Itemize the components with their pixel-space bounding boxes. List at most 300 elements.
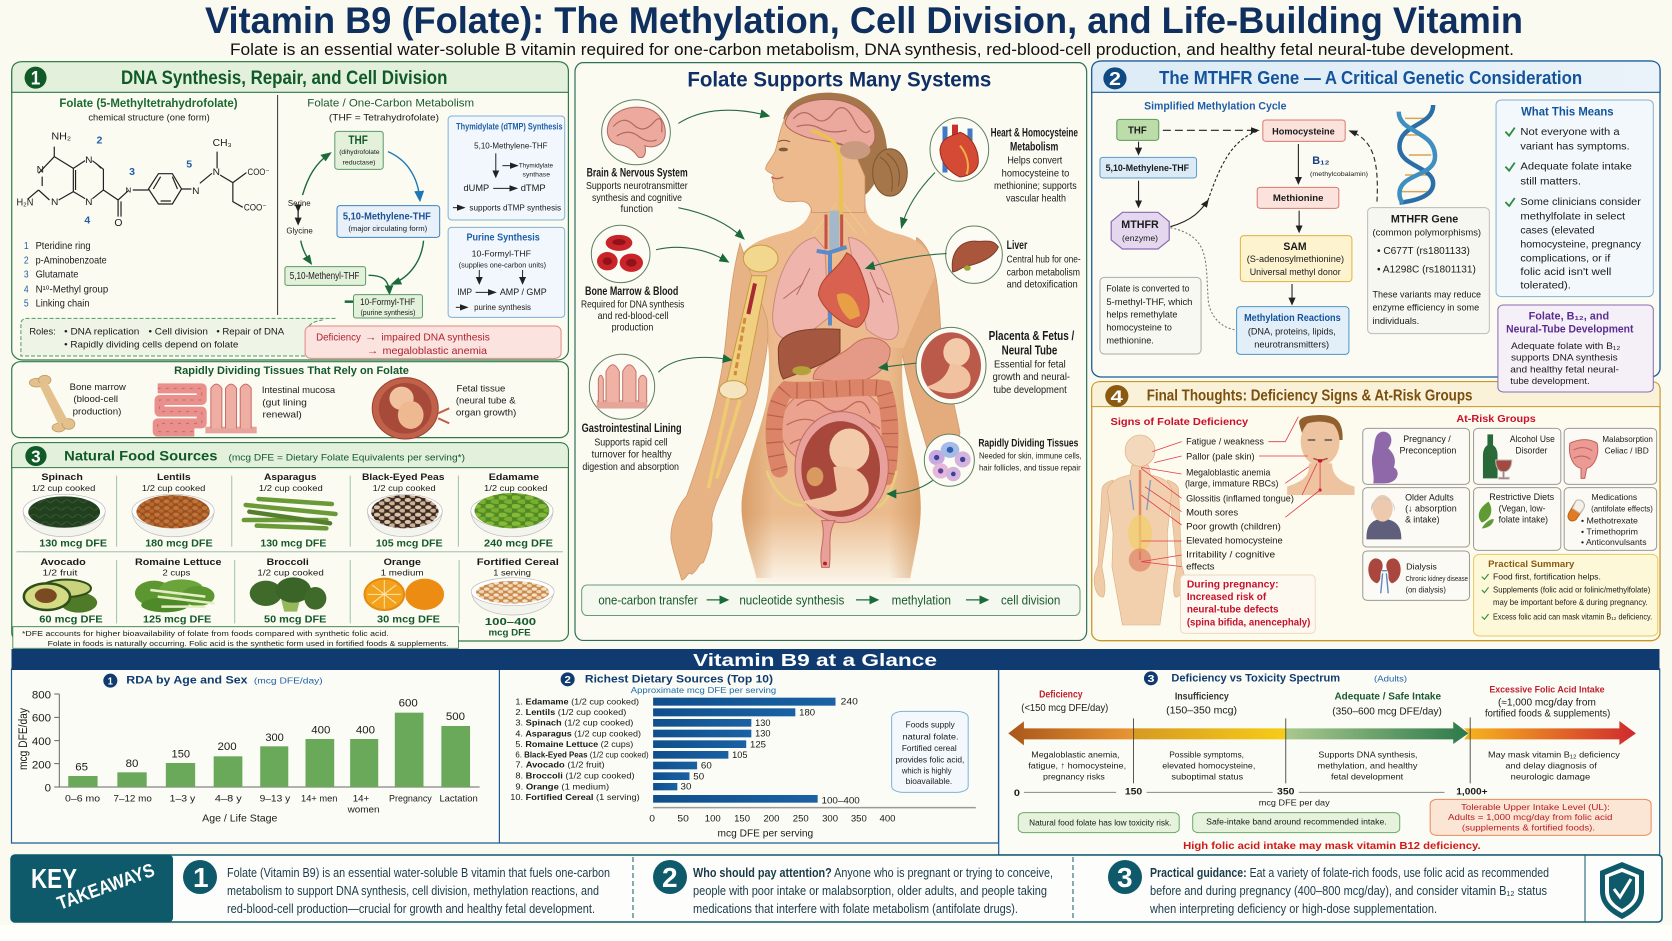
zone descriptions: methylation, and healthy bbox=[1318, 761, 1418, 771]
bar values: 180 bbox=[799, 707, 815, 718]
y axis values: 200 bbox=[32, 758, 51, 771]
zone descriptions: fetal development bbox=[1331, 772, 1403, 782]
callout: upper limit: Adults = 1,000 mcg/day from folic acid bbox=[1448, 813, 1612, 823]
box: what this means: cases (elevated bbox=[1520, 225, 1595, 236]
pathway bar: methylation bbox=[892, 593, 951, 608]
node: formyl THF bbox=[354, 295, 422, 318]
food: asparagus: Asparagus bbox=[264, 472, 316, 483]
node: methylene THF bbox=[1100, 157, 1197, 178]
zone labels: Adequate / Safe Intake bbox=[1334, 691, 1442, 702]
food: avocado: Avocado bbox=[40, 557, 86, 568]
text: gastrointestinal lining: digestion and absorption bbox=[582, 461, 679, 472]
panel: natural food sources bbox=[12, 443, 568, 648]
zone descriptions: suboptimal status bbox=[1171, 772, 1243, 782]
heading: folate structure: Folate (5-Methyltetrahydrofolate) bbox=[59, 97, 238, 110]
food: orange: 1 medium bbox=[381, 568, 424, 578]
structure legend: 1 bbox=[24, 241, 29, 252]
box: MTHFR gene polymorphisms: individuals. bbox=[1373, 316, 1419, 327]
food: avocado: 1/2 fruit bbox=[43, 568, 78, 578]
bone marrow label: Bone marrow bbox=[70, 382, 126, 393]
box: purine synthesis: AMP / GMP bbox=[500, 287, 547, 298]
banner: vitamin B9 at a glance: Vitamin B9 at a Glance bbox=[693, 650, 937, 670]
category labels: 0–6 mo bbox=[65, 793, 100, 804]
chemical structure diagram: 2 bbox=[96, 135, 102, 147]
zone descriptions: fatigue, ↑ homocysteine, bbox=[1028, 761, 1126, 771]
text: bone marrow and blood: Required for DNA synthesis bbox=[581, 299, 685, 310]
bone marrow label: (blood-cell bbox=[73, 394, 118, 405]
takeaway 1: red-blood-cell production—crucial for growth and healthy fetal development. bbox=[227, 901, 595, 916]
box: what this means: folic acid isn't well bbox=[1520, 267, 1611, 278]
text: bone marrow and blood: Bone Marrow & Blood bbox=[585, 285, 679, 298]
card: older adults: & intake) bbox=[1405, 515, 1440, 525]
icon: bone bbox=[29, 375, 75, 432]
node: methionine bbox=[1257, 187, 1339, 208]
x axis title: mcg DFE per serving bbox=[718, 828, 813, 839]
key takeaways badge bbox=[11, 855, 173, 922]
node: MTHFR enzyme bbox=[1111, 212, 1169, 249]
chart heading: Deficiency vs Toxicity Spectrum bbox=[1171, 671, 1340, 684]
deficiency callout: Deficiency bbox=[316, 333, 362, 344]
large intestine bbox=[774, 388, 890, 477]
intestinal mucosa label: (gut lining bbox=[262, 398, 307, 409]
heading: food sources bbox=[64, 449, 465, 464]
pathway bar: cell division bbox=[1001, 593, 1060, 608]
text: placenta and fetus: tube development bbox=[993, 384, 1067, 395]
icon: brain bbox=[602, 100, 670, 165]
box: practical summary bbox=[1474, 554, 1658, 636]
heading: MTHFR: The MTHFR Gene — A Critical Genetic Consideration bbox=[1159, 68, 1582, 89]
structure legend: 2 bbox=[24, 256, 29, 267]
x axis labels bbox=[649, 814, 896, 824]
node: THF: (dihydrofolate bbox=[339, 149, 380, 156]
text: brain and nervous system: Brain & Nervous System bbox=[587, 167, 688, 179]
fetal tissue label: (neural tube & bbox=[456, 396, 516, 407]
food: romaine lettuce: 125 mcg DFE bbox=[143, 615, 211, 626]
node: MTHFR enzyme: MTHFR bbox=[1121, 220, 1159, 231]
food: lentils: Lentils bbox=[157, 472, 191, 483]
note: folate conversion: helps remethylate bbox=[1106, 310, 1177, 320]
dose scale: mcg DFE per day bbox=[1259, 799, 1331, 808]
callout: upper limit bbox=[1430, 799, 1651, 835]
card: dialysis: Dialysis bbox=[1406, 562, 1437, 571]
note: folate conversion: Folate is converted to bbox=[1106, 284, 1189, 294]
takeaway 1: metabolism to support DNA synthesis, cell division, methylation reactions, and bbox=[227, 883, 599, 898]
DFE footnote bbox=[13, 627, 458, 648]
bar value labels: 150 bbox=[172, 748, 190, 760]
panel: MTHFR gene bbox=[1092, 61, 1660, 377]
text: bone marrow and blood: and red-blood-cell bbox=[598, 310, 668, 321]
hair and bun bbox=[783, 93, 887, 195]
key takeaways badge: TAKEAWAYS bbox=[55, 860, 158, 915]
food: fortified cereal: 100–400 bbox=[485, 616, 536, 628]
box: thymidylate synthesis: 5,10-Methylene-THF bbox=[474, 141, 548, 151]
x axis labels: 350 bbox=[851, 814, 867, 824]
x axis labels: 400 bbox=[880, 814, 896, 824]
text: heart and homocysteine: methionine; supports bbox=[994, 180, 1077, 191]
food: lentils: 180 mcg DFE bbox=[145, 539, 213, 550]
node: methylene THF bbox=[337, 206, 440, 237]
category labels: 1–3 y bbox=[170, 793, 196, 804]
deficiency callout: → bbox=[365, 333, 377, 344]
subtitle: Folate is an essential water-soluble B vitamin required for one-carbon metabolism, DNA synthesis, red-blood-cell production, and healthy fetal neural-tube development. bbox=[230, 41, 1514, 59]
food: broccoli bbox=[250, 557, 327, 626]
serine glycine label bbox=[286, 198, 313, 235]
food: asparagus bbox=[244, 472, 336, 550]
structure legend: 3 bbox=[24, 270, 29, 281]
warning line: High folic acid intake may mask vitamin B12 deficiency. bbox=[1183, 840, 1481, 852]
node: SAM bbox=[1240, 236, 1352, 282]
box: what this means: variant has symptoms. bbox=[1520, 141, 1630, 152]
takeaway 1 bbox=[183, 860, 610, 916]
x axis labels: 150 bbox=[734, 814, 750, 824]
box: practical summary: Practical Summary bbox=[1488, 559, 1575, 570]
zone labels bbox=[1021, 685, 1610, 719]
note: fortified cereal: Foods supply bbox=[906, 720, 955, 730]
card: restrictive diets bbox=[1474, 488, 1561, 550]
list: deficiency signs: Poor growth (children) bbox=[1186, 522, 1281, 532]
food labels: 7. Avocado (1/2 fruit) bbox=[515, 760, 605, 770]
chemical structure diagram: 3 bbox=[129, 166, 135, 178]
text: rapidly dividing tissues: hair follicles, and tissue repair bbox=[979, 463, 1081, 473]
box: what this means: Not everyone with a bbox=[1520, 127, 1620, 138]
node: methylene THF: (major circulating form) bbox=[348, 224, 428, 233]
roles box bbox=[21, 318, 336, 356]
text: gastrointestinal lining: Supports rapid cell bbox=[594, 437, 668, 448]
food labels: 3. Spinach (1/2 cup cooked) bbox=[515, 718, 633, 728]
roles box: • Repair of DNA bbox=[216, 327, 285, 337]
node: MTHFR enzyme: (enzyme) bbox=[1122, 233, 1158, 243]
intestinal mucosa label: renewal) bbox=[263, 410, 302, 420]
zone labels: (<150 mcg DFE/day) bbox=[1021, 703, 1109, 714]
key takeaways badge: KEY bbox=[31, 863, 77, 894]
zone descriptions bbox=[1028, 750, 1621, 782]
icon: heart bbox=[930, 118, 989, 181]
takeaway 3 bbox=[1108, 860, 1549, 916]
bar values: 240 bbox=[841, 697, 858, 707]
food: black-eyed peas bbox=[362, 472, 444, 550]
bone marrow label bbox=[70, 382, 126, 417]
bar values: 60 bbox=[701, 761, 712, 771]
x axis labels: 100 bbox=[705, 814, 721, 824]
chemical structure diagram: N bbox=[51, 197, 58, 208]
y axis values: 400 bbox=[32, 735, 51, 748]
food: orange bbox=[365, 557, 444, 626]
zone labels: Insufficiency bbox=[1175, 691, 1229, 702]
food: spinach: 130 mcg DFE bbox=[39, 539, 107, 550]
takeaway 3: Practical guidance: Eat a variety of folate-rich foods, use folic acid as recommended bbox=[1150, 865, 1549, 880]
text: gastrointestinal lining bbox=[582, 422, 682, 472]
chemical structure diagram: N bbox=[85, 197, 92, 208]
text: heart and homocysteine: Metabolism bbox=[1010, 141, 1058, 154]
bar values: 105 bbox=[732, 750, 748, 761]
bar values bbox=[681, 697, 860, 806]
list: deficiency signs: Irritability / cognitive bbox=[1186, 550, 1276, 560]
chart heading: 3 bbox=[1147, 673, 1155, 685]
box: thymidylate synthesis: dUMP bbox=[464, 183, 490, 194]
node: methionine: Methionine bbox=[1273, 193, 1324, 204]
bar value labels: 400 bbox=[311, 724, 330, 736]
intestinal mucosa label bbox=[262, 385, 336, 420]
liver bbox=[778, 329, 840, 379]
icon: intestinal villi bbox=[589, 354, 655, 419]
roles box: Roles: bbox=[29, 327, 56, 337]
category labels: Lactation bbox=[439, 793, 478, 804]
card: alcohol use: Disorder bbox=[1516, 446, 1548, 456]
section number 1 bbox=[25, 67, 47, 89]
text: liver: and detoxification bbox=[1007, 279, 1078, 290]
pelvic tissue bbox=[767, 471, 897, 507]
serine glycine label: Glycine bbox=[286, 226, 313, 235]
callout: during pregnancy bbox=[1180, 575, 1315, 633]
chemical structure diagram: N bbox=[37, 165, 44, 176]
node: SAM: SAM bbox=[1283, 242, 1307, 253]
text: heart and homocysteine: homocysteine to bbox=[1002, 168, 1069, 178]
deficiency callout: megaloblastic anemia bbox=[382, 346, 487, 357]
category labels bbox=[65, 793, 478, 815]
bar values: 125 bbox=[750, 739, 766, 750]
fetal tissue label: Fetal tissue bbox=[457, 384, 505, 395]
callout: upper limit: (supplements & fortified foods). bbox=[1462, 824, 1595, 833]
chart heading: RDA by Age and Sex bbox=[126, 673, 248, 686]
card: pregnancy: Pregnancy / bbox=[1403, 434, 1451, 445]
uterus and fetus bbox=[795, 412, 888, 523]
trachea and vessels bbox=[829, 211, 839, 249]
deficiency callout: → bbox=[367, 346, 378, 357]
DFE footnote: Folate in foods is naturally occurring. Folic acid is the synthetic form used in fortified foods & supplements. bbox=[48, 639, 448, 648]
structure legend: p-Aminobenzoate bbox=[36, 256, 107, 267]
text: heart and homocysteine: vascular health bbox=[1006, 193, 1066, 204]
text: heart and homocysteine: Helps convert bbox=[1007, 155, 1063, 166]
box: what this means bbox=[1496, 100, 1653, 297]
heading: one-carbon metabolism: Folate / One-Carbon Metabolism bbox=[307, 98, 474, 110]
section number 2 bbox=[1103, 67, 1127, 90]
bar values: 30 bbox=[681, 782, 691, 792]
chart heading bbox=[561, 672, 776, 695]
text: heart and homocysteine: Heart & Homocysteine bbox=[991, 127, 1078, 140]
deficiency callout bbox=[305, 326, 561, 358]
illustration: portrait bbox=[1287, 415, 1355, 495]
panel: rapidly dividing tissues bbox=[12, 362, 568, 439]
zone descriptions: Megaloblastic anemia, bbox=[1031, 750, 1120, 760]
food: romaine lettuce bbox=[135, 557, 221, 626]
note: safe-intake band: Safe-intake band around recommended intake. bbox=[1206, 818, 1387, 827]
food: avocado bbox=[24, 557, 103, 626]
food: romaine lettuce: Romaine Lettuce bbox=[135, 557, 221, 568]
card: restrictive diets: (Vegan, low- bbox=[1499, 504, 1545, 514]
section number 3: 3 bbox=[31, 447, 41, 466]
food: black-eyed peas: 1/2 cup cooked bbox=[373, 483, 436, 493]
food: fortified cereal: Fortified Cereal bbox=[477, 557, 559, 568]
takeaway 3: before and during pregnancy (400–800 mcg/day), and consider vitamin B₁₂ status bbox=[1150, 883, 1547, 898]
chemical structure diagram: H₂N bbox=[17, 197, 33, 209]
zone descriptions: May mask vitamin B₁₂ deficiency bbox=[1488, 750, 1621, 760]
chemical structure diagram bbox=[17, 131, 270, 229]
takeaway 2: Who should pay attention? Anyone who is pregnant or trying to conceive, bbox=[693, 865, 1053, 880]
y axis title: mcg DFE/day bbox=[18, 708, 30, 770]
food labels: 9. Orange (1 medium) bbox=[515, 781, 609, 791]
y axis values: 600 bbox=[32, 711, 51, 724]
box: thymidylate synthesis: synthase bbox=[523, 172, 550, 179]
box: what this means: methylfolate in select bbox=[1520, 211, 1625, 222]
chemical structure diagram: N bbox=[125, 186, 131, 195]
icon: intestine bbox=[158, 384, 257, 433]
chart: RDA by age and sex bbox=[32, 673, 480, 824]
box: what this means: homocysteine, pregnancy bbox=[1520, 239, 1641, 250]
zone labels: (150–350 mcg) bbox=[1166, 706, 1237, 716]
box: thymidylate synthesis: Thymidylate (dTMP) Synthesis bbox=[456, 122, 563, 132]
card: dialysis: (on dialysis) bbox=[1405, 585, 1446, 594]
box: folate, B12 and neural-tube development: tube development. bbox=[1510, 376, 1590, 387]
roles box: • DNA replication bbox=[64, 327, 139, 337]
food labels: 8. Broccoli (1/2 cup cooked) bbox=[515, 771, 635, 781]
text: rapidly dividing tissues: Needed for skin, immune cells, bbox=[979, 451, 1082, 461]
text: brain and nervous system: Supports neurotransmitter bbox=[586, 180, 688, 191]
chemical structure diagram: N bbox=[192, 186, 199, 197]
dose scale: 1,000+ bbox=[1456, 787, 1488, 797]
note: fortified cereal: Fortified cereal bbox=[902, 743, 957, 753]
node: THF bbox=[1117, 119, 1159, 140]
box: folate, B12 and neural-tube development: supports DNA synthesis bbox=[1511, 353, 1618, 363]
text: rapidly dividing tissues: Rapidly Dividing Tissues bbox=[978, 437, 1078, 450]
box: thymidylate synthesis: Thymidylate bbox=[519, 163, 553, 169]
pathway bar: one-carbon transfer bbox=[598, 593, 698, 608]
list: deficiency signs: Megaloblastic anemia bbox=[1186, 468, 1271, 478]
text: placenta and fetus bbox=[989, 328, 1075, 395]
chemical structure diagram: 4 bbox=[84, 215, 90, 227]
card: malabsorption: Malabsorption bbox=[1602, 434, 1653, 444]
structure legend: N¹⁰-Methyl group bbox=[36, 285, 109, 295]
zone labels: Excessive Folic Acid Intake bbox=[1489, 685, 1605, 695]
card: older adults: (↓ absorption bbox=[1405, 504, 1457, 514]
bar values: 100–400 bbox=[821, 795, 860, 806]
list: deficiency signs: Glossitis (inflamed tongue) bbox=[1186, 494, 1294, 504]
takeaway 1: Folate (Vitamin B9) is an essential water-soluble B vitamin that fuels one-carbon bbox=[227, 865, 610, 880]
list: deficiency signs: Elevated homocysteine bbox=[1186, 536, 1283, 546]
structure legend bbox=[24, 241, 109, 310]
card: medications: • Methotrexate bbox=[1581, 516, 1638, 525]
bar values: 130 bbox=[755, 718, 771, 729]
chemical structure diagram: N bbox=[213, 167, 220, 178]
bars bbox=[653, 698, 836, 803]
box: purine synthesis: purine synthesis bbox=[474, 302, 531, 312]
box: MTHFR gene polymorphisms: (common polymorphisms) bbox=[1373, 228, 1481, 238]
heading: food sources: Natural Food Sources bbox=[64, 449, 217, 464]
text: placenta and fetus: growth and neural- bbox=[993, 371, 1070, 382]
label: B12: (methylcobalamin) bbox=[1310, 170, 1368, 178]
box: purine synthesis bbox=[448, 227, 565, 317]
box: practical summary: Food first, fortification helps. bbox=[1493, 572, 1601, 581]
list: deficiency signs: Mouth sores bbox=[1186, 508, 1238, 518]
zone descriptions: elevated homocysteine, bbox=[1162, 761, 1255, 771]
box: purine synthesis: IMP bbox=[457, 287, 472, 298]
food: edamame: 240 mcg DFE bbox=[484, 539, 553, 550]
panel: key takeaways bbox=[11, 855, 1662, 922]
symptom connector lines bbox=[1141, 417, 1320, 567]
bars bbox=[68, 713, 470, 787]
food: fortified cereal bbox=[471, 557, 559, 639]
text: heart and homocysteine bbox=[991, 127, 1078, 204]
box: folate, B12 and neural-tube development: Adequate folate with B₁₂ bbox=[1511, 341, 1620, 352]
callout: during pregnancy: Increased risk of bbox=[1187, 592, 1267, 603]
face bbox=[766, 115, 865, 213]
label: B12 bbox=[1310, 156, 1368, 178]
food: edamame: 1/2 cup cooked bbox=[484, 483, 548, 493]
node: methenyl THF: 5,10-Methenyl-THF bbox=[290, 271, 359, 282]
text: gastrointestinal lining: turnover for healthy bbox=[592, 449, 672, 460]
node: methylation reactions: neurotransmitters) bbox=[1254, 340, 1329, 350]
box: thymidylate synthesis: supports dTMP synthesis bbox=[469, 203, 562, 213]
lungs bbox=[773, 237, 828, 340]
icon: liver bbox=[946, 226, 1002, 283]
card: alcohol use: Alcohol Use bbox=[1510, 434, 1555, 445]
node: homocysteine: Homocysteine bbox=[1272, 127, 1335, 137]
heading: folate structure: chemical structure (one form) bbox=[88, 113, 210, 123]
callout: during pregnancy: (spina bifida, anencephaly) bbox=[1187, 617, 1311, 628]
category labels: Pregnancy bbox=[389, 793, 432, 804]
box: MTHFR gene polymorphisms: • C677T (rs1801133) bbox=[1377, 246, 1470, 257]
bar value labels: 80 bbox=[126, 758, 138, 770]
chemical structure diagram: COO⁻ bbox=[244, 203, 267, 214]
card: malabsorption bbox=[1564, 428, 1657, 484]
food: black-eyed peas: 105 mcg DFE bbox=[376, 539, 443, 550]
box: purine synthesis: (supplies one-carbon units) bbox=[459, 261, 546, 269]
text: bone marrow and blood bbox=[581, 285, 685, 333]
illustration: body with sign markers bbox=[1094, 435, 1185, 625]
structure legend: 5 bbox=[24, 299, 29, 310]
text: brain and nervous system: synthesis and cognitive bbox=[592, 192, 682, 203]
bar value labels bbox=[75, 697, 465, 773]
food: broccoli: 1/2 cup cooked bbox=[257, 568, 324, 578]
zone labels: fortified foods & supplements) bbox=[1485, 709, 1610, 719]
zone labels: (350–600 mcg DFE/day) bbox=[1332, 707, 1442, 717]
list: deficiency signs: effects bbox=[1186, 562, 1215, 572]
small intestine bbox=[780, 385, 887, 469]
text: placenta and fetus: Essential for fetal bbox=[994, 359, 1066, 370]
box: what this means: complications, or if bbox=[1520, 253, 1611, 264]
food labels bbox=[510, 696, 649, 802]
text: brain and nervous system: function bbox=[621, 203, 653, 214]
note: fortified cereal: provides folic acid, bbox=[895, 755, 964, 765]
box: MTHFR gene polymorphisms: enzyme efficiency in some bbox=[1373, 303, 1479, 313]
food labels: 1. Edamame (1/2 cup cooked) bbox=[515, 696, 639, 706]
node: methenyl THF bbox=[285, 267, 366, 285]
torso shading bbox=[742, 333, 921, 578]
x axis labels: 50 bbox=[677, 814, 689, 824]
category labels: 4–8 y bbox=[215, 793, 242, 804]
food: broccoli: Broccoli bbox=[267, 557, 309, 568]
food: edamame bbox=[471, 472, 553, 550]
heading: one-carbon metabolism bbox=[307, 98, 474, 124]
food: spinach: Spinach bbox=[41, 472, 83, 483]
note: fortified cereal: which is highly bbox=[901, 765, 952, 775]
card: medications: • Trimethoprim bbox=[1581, 527, 1638, 536]
card: medications: (antifolate effects) bbox=[1591, 504, 1653, 514]
note: fortified cereal bbox=[892, 711, 968, 792]
note: folate conversion: methionine. bbox=[1106, 336, 1154, 346]
node: formyl THF: 10-Formyl-THF bbox=[360, 297, 415, 308]
chart: deficiency vs toxicity spectrum bbox=[1008, 671, 1651, 852]
note: folate conversion: homocysteine to bbox=[1106, 323, 1172, 333]
note: natural folate: Natural food folate has low toxicity risk. bbox=[1029, 819, 1171, 828]
box: thymidylate synthesis bbox=[448, 116, 565, 220]
panel: folate supports many systems bbox=[575, 63, 1087, 640]
category labels: women bbox=[347, 805, 379, 815]
food: edamame: Edamame bbox=[489, 472, 539, 483]
heart bbox=[818, 253, 869, 327]
chart: richest dietary sources bbox=[510, 672, 976, 839]
chart heading: Approximate mcg DFE per serving bbox=[631, 685, 776, 695]
bar values: 50 bbox=[693, 771, 704, 782]
